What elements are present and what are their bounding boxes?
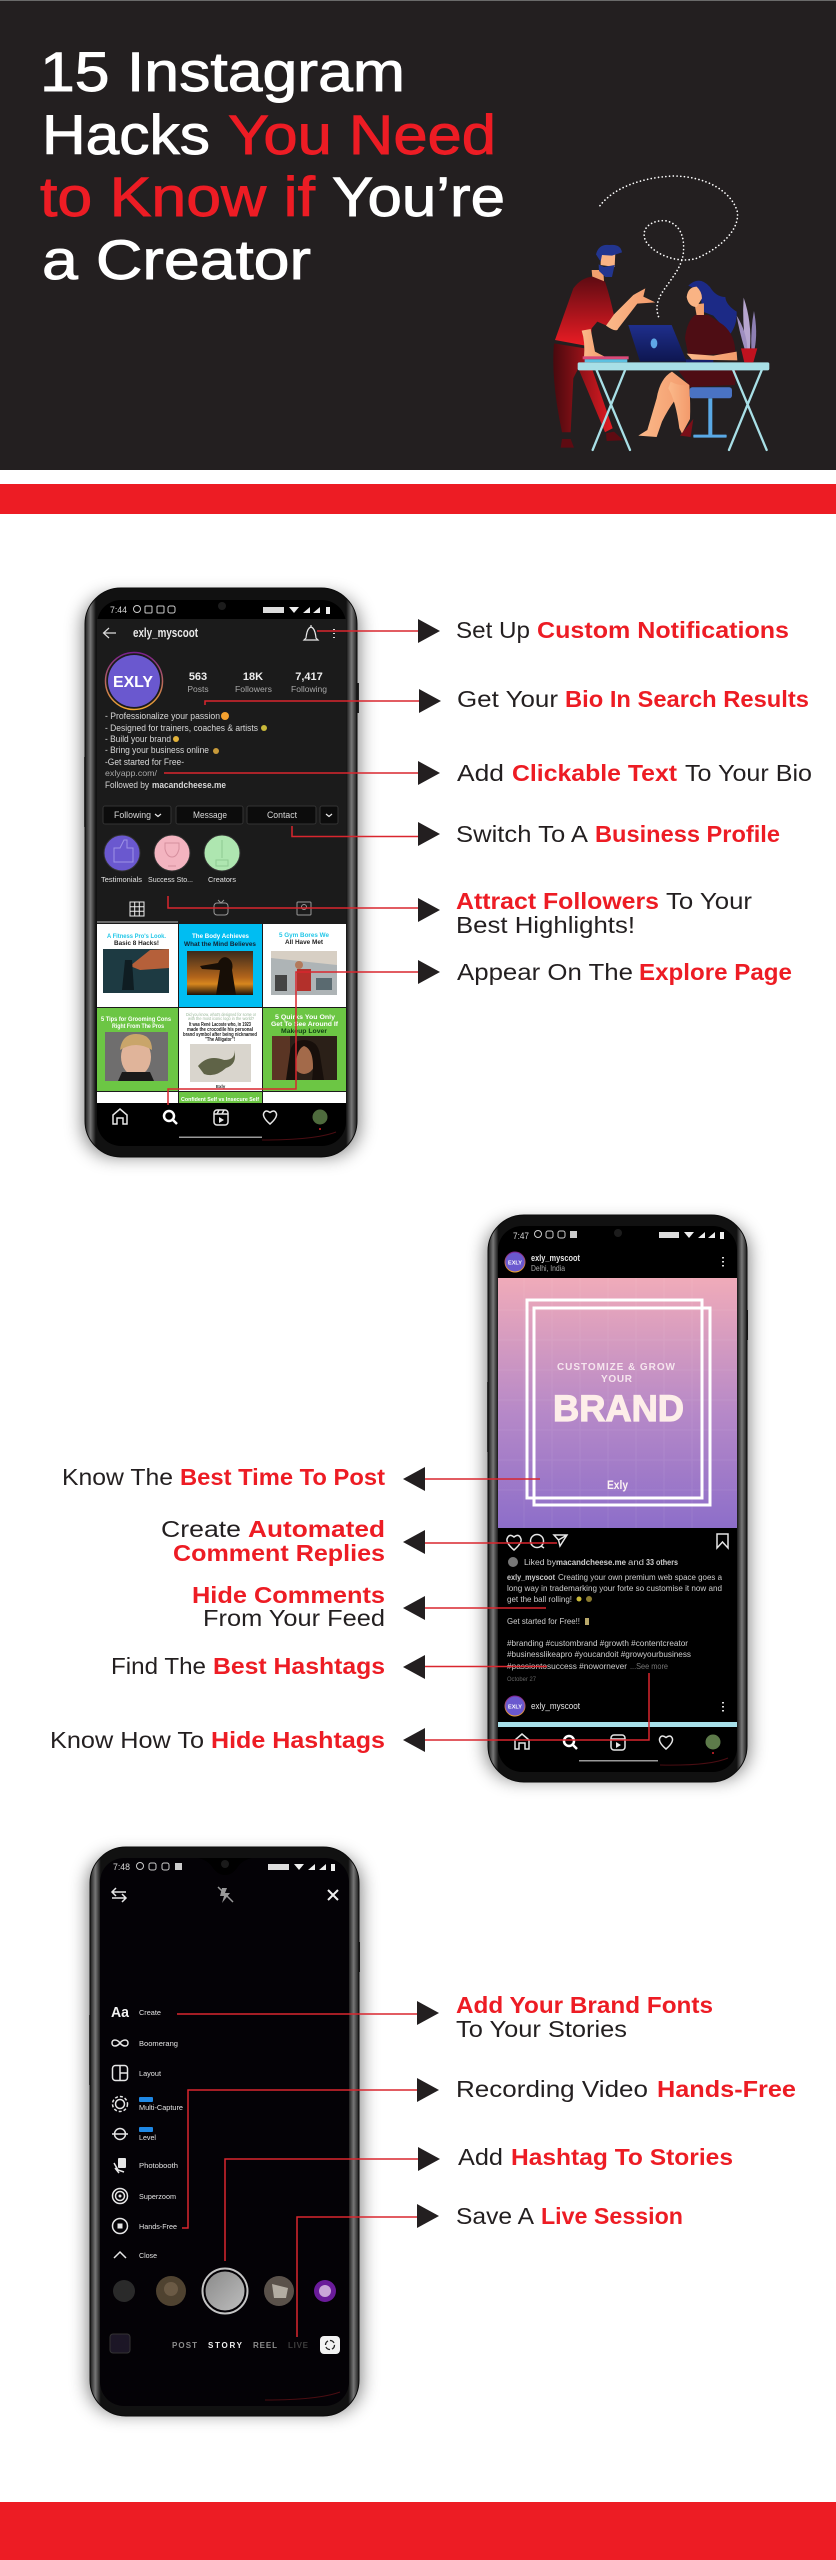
profile stats: Posts [187,684,209,694]
profile stats: 563 [189,671,207,683]
post: gym bores: All Have Met [285,939,324,946]
callout: Add Clickable Text To Your Bio: Clickable Text [512,760,677,786]
post: fitness pro [97,924,178,1007]
tool: Boomerang: Boomerang [139,2039,178,2048]
next post header: exly_myscoot [531,1701,580,1712]
profile stats: 18K [243,671,263,683]
illustration: two creators at a desk with laptop [553,176,769,450]
phone 1: Instagram profile screen [83,588,359,1157]
post: crocodile: It was René Lacoste who, in 1923 [189,1022,251,1028]
post action icons [507,1534,728,1550]
next post header [498,1696,737,1727]
callout: Appear On The Explore Page [168,959,792,1105]
post: gym bores: 5 Gym Bores We [279,932,329,939]
callout: Create Automated Comment Replies: Create [161,1516,241,1542]
tool: Superzoom [112,2188,176,2204]
likes and caption: and [628,1557,644,1567]
phone body [486,1215,749,1782]
capture modes: REEL [253,2341,277,2350]
callout: Add Clickable Text To Your Bio [164,760,812,786]
notch [593,1226,644,1243]
callout: Add Your Brand Fonts To Your Stories [177,1992,713,2042]
brand post image [498,1278,737,1528]
callout: Switch To A Business Profile: Switch To A [456,821,588,847]
bottom red band [0,2502,836,2560]
phone 3: Instagram stories camera screen [88,1847,361,2416]
bio text: Followed by [105,780,149,790]
callout: Know The Best Time To Post [62,1464,540,1491]
tool: Level [112,2127,156,2142]
callout: Add Your Brand Fonts To Your Stories: Add Your Brand Fonts [456,1992,713,2018]
title: You’re [332,165,505,228]
post header [505,1252,723,1273]
woman [638,281,737,437]
likes and caption: October 27 [507,1677,537,1683]
avatar [106,652,162,710]
callout: Recording Video Hands-Free: Recording Video [456,2076,648,2102]
callout: Set Up Custom Notifications: Custom Notifications [537,617,789,643]
capture modes [110,2334,340,2354]
post header: EXLY [508,1260,523,1266]
phone body [83,588,359,1157]
callout: Get Your Bio In Search Results [205,686,809,713]
callout: Create Automated Comment Replies: Comment Replies [173,1540,385,1566]
callout: Save A Live Session: Save A [456,2203,534,2229]
post grid [97,924,346,1103]
story highlights: Testimonials [101,875,142,884]
likes and caption: Liked by [524,1557,557,1567]
bio text: exlyapp.com/ [105,768,158,778]
tool: Create: Aa [111,2004,130,2021]
tool: Create: Create [139,2008,161,2017]
profile screen background [97,619,346,1103]
plant [737,298,757,362]
callout: Add Clickable Text To Your Bio: To Your Bio [685,760,812,786]
callout: Add Clickable Text To Your Bio: Add [457,760,504,786]
bio text: -Get started for Free- [105,757,184,767]
bio text: - Professionalize your passion [105,711,220,721]
profile buttons: Message [193,810,227,820]
title: You Need [228,103,496,166]
post: gym bores [263,924,346,1007]
callout: Recording Video Hands-Free: Hands-Free [657,2076,796,2102]
avatar: EXLY [113,674,153,691]
notch [195,600,250,619]
callout: Find The Best Hashtags: Find The [111,1653,206,1679]
profile buttons [103,806,338,824]
callout: Appear On The Explore Page: Explore Page [639,959,792,985]
post: crocodile: made the crocodile his personal [187,1027,254,1033]
callout: Attract Followers To Your Best Highlights: Attract Followers [456,888,659,914]
tool: Superzoom: Superzoom [139,2192,176,2201]
brand post image: Exly [607,1480,629,1492]
story highlights: Success Sto... [148,875,193,884]
callout: Know How To Hide Hashtags [50,1673,649,1753]
filter carousel and shutter [113,2268,336,2314]
profile buttons: Contact [267,810,297,820]
callout: Set Up Custom Notifications: Set Up [456,617,530,643]
tool: Close [114,2251,157,2260]
callout: Attract Followers To Your Best Highlights [168,888,752,938]
title: Hacks [42,103,210,166]
likes and caption: Get started for Free!! [507,1616,580,1626]
callout: Save A Live Session: Live Session [541,2203,683,2229]
hero banner background [0,0,836,470]
likes and caption: get the ball rolling! [507,1594,572,1604]
status bar: 7:44 [110,605,127,615]
brand post image: YOUR [601,1374,633,1385]
likes and caption: #branding #custombrand #growth #contentcreator [507,1638,688,1648]
callout: Find The Best Hashtags: Best Hashtags [213,1653,385,1679]
desk [578,362,769,450]
profile stats: 7,417 [295,671,323,683]
books [583,356,629,362]
dotted thought loop [600,176,738,319]
next post header: EXLY [508,1704,523,1710]
bottom navigation [515,1734,720,1762]
tool: Multi-Capture [112,2096,183,2112]
post row partial: Confident Self vs Insecure Self [181,1097,259,1103]
post row partial [97,1092,346,1103]
brand post image: CUSTOMIZE & GROW [557,1362,676,1373]
profile stats: Followers [235,684,272,694]
likes and caption: #businesslikeapro #youcandoit #growyourbusiness [507,1649,692,1659]
profile tabs [97,900,311,922]
callout: Set Up Custom Notifications [317,617,789,643]
callout: Switch To A Business Profile: Business Profile [595,821,780,847]
post: makeup lover: 5 Quirks You Only [275,1014,335,1021]
likes and caption: exly_myscoot [507,1572,555,1582]
post: fitness pro: Basic 8 Hacks! [114,940,159,947]
brand post image: BRAND [553,1388,684,1429]
callout: Add Hashtag To Stories [225,2144,733,2261]
callout: Appear On The Explore Page: Appear On The [457,959,633,985]
tool: Level: Level [139,2133,156,2142]
callout: Get Your Bio In Search Results: Get Your [457,686,558,712]
bio text: - Bring your business online [105,745,209,755]
post: body achieves: The Body Achieves [192,933,249,940]
profile header: exly_myscoot [133,626,199,640]
bio text: - Designed for trainers, coaches & artists [105,723,258,733]
likes and caption: ...See more [630,1661,668,1671]
likes and caption: macandcheese.me [556,1557,626,1567]
callout: Add Hashtag To Stories: Hashtag To Stories [511,2144,733,2170]
tool: Layout: Layout [139,2069,162,2078]
post: grooming tips: Right From The Pros [112,1024,165,1030]
callout: Hide Comments From Your Feed: From Your Feed [203,1605,385,1631]
post: crocodile: with the most iconic logo in the world? [188,1016,254,1021]
profile buttons: Following [114,810,151,820]
tool: Multi-Capture: Multi-Capture [139,2103,183,2112]
post: crocodile [179,1008,262,1091]
stool [690,387,732,438]
post header: Delhi, India [531,1263,565,1273]
title: 15 Instagram [40,40,405,103]
post: crocodile: brand symbol after being nicknamed [183,1032,257,1038]
callout: Know The Best Time To Post: Best Time To Post [180,1464,385,1490]
red divider band [0,484,836,514]
post header: exly_myscoot [531,1253,581,1264]
likes and caption [507,1557,722,1683]
post: body achieves [179,924,262,1007]
callout: Recording Video Hands-Free [182,2076,796,2228]
phone 2: Instagram post screen [486,1215,749,1782]
status bar: 7:47 [513,1231,529,1241]
likes and caption: long way in trademarking your forte so customise it now and [507,1583,722,1593]
callout: Create Automated Comment Replies [161,1516,557,1566]
callout: Hide Comments From Your Feed: Hide Comments [192,1582,385,1608]
callout: Get Your Bio In Search Results: Bio In Search Results [565,686,809,712]
story tools menu [111,2004,183,2260]
callout: Save A Live Session [297,2203,683,2337]
post: makeup lover: Makeup Lover [281,1028,327,1035]
tool: Photobooth [114,2158,178,2173]
capture modes: LIVE [288,2341,309,2350]
tool: Create [111,2004,161,2021]
callout: Add Hashtag To Stories: Add [458,2144,503,2170]
man [553,245,655,448]
tool: Hands-Free: Hands-Free [139,2222,177,2231]
callout: Switch To A Business Profile [292,821,780,847]
phone body [88,1847,361,2416]
likes and caption: #passiontosuccess #nowornever [507,1661,627,1671]
story highlights [101,835,240,884]
callout: Find The Best Hashtags [111,1653,547,1679]
post: makeup lover: Get To See Around If [271,1021,339,1028]
callout: Add Your Brand Fonts To Your Stories: To Your Stories [456,2016,627,2042]
post: makeup lover [263,1008,346,1091]
status bar [513,1230,724,1241]
post: crocodile: Exly [216,1084,226,1089]
title: to Know if [40,165,315,228]
bio text: - Build your brand [105,734,171,744]
laptop [628,325,713,362]
notch [198,1858,252,1875]
callout: Know How To Hide Hashtags: Know How To [50,1727,204,1753]
likes and caption: 33 others [646,1557,678,1567]
bio text [105,711,267,790]
callout: Create Automated Comment Replies: Automated [248,1516,385,1542]
capture modes: STORY [208,2341,243,2350]
callout: Hide Comments From Your Feed [192,1582,546,1631]
title: a Creator [42,228,311,291]
likes and caption: Creating your own premium web space goes a [558,1572,722,1582]
callout: Know How To Hide Hashtags: Hide Hashtags [211,1727,385,1753]
bottom navigation [113,1109,328,1138]
callout: Attract Followers To Your Best Highlights: Best Highlights! [456,912,635,938]
profile stats [187,671,327,694]
callout: Know The Best Time To Post: Know The [62,1464,173,1490]
story highlights: Creators [208,875,236,884]
tool: Close: Close [139,2251,157,2260]
post: crocodile: "The Alligator"! [205,1037,235,1043]
tool: Hands-Free [112,2218,177,2234]
bio text: macandcheese.me [152,780,226,790]
post: grooming tips: 5 Tips for Grooming Cons [101,1017,172,1023]
profile stats: Following [291,684,327,694]
title [40,40,505,291]
profile header [104,625,334,640]
callout: Attract Followers To Your Best Highlights: To Your [666,888,752,914]
camera top controls [112,1887,338,1903]
post: fitness pro: A Fitness Pro's Look. [107,933,166,940]
tool: Boomerang [112,2039,178,2048]
status bar [110,605,330,615]
capture modes: POST [172,2341,197,2350]
post: grooming tips [97,1008,178,1091]
status bar [113,1862,335,1872]
post: crocodile: Did you know, what's designed for some or [186,1012,256,1017]
tool: Photobooth: Photobooth [139,2161,178,2170]
post: body achieves: What the Mind Believes [184,941,256,948]
status bar: 7:48 [113,1862,130,1872]
tool: Layout [112,2066,162,2080]
